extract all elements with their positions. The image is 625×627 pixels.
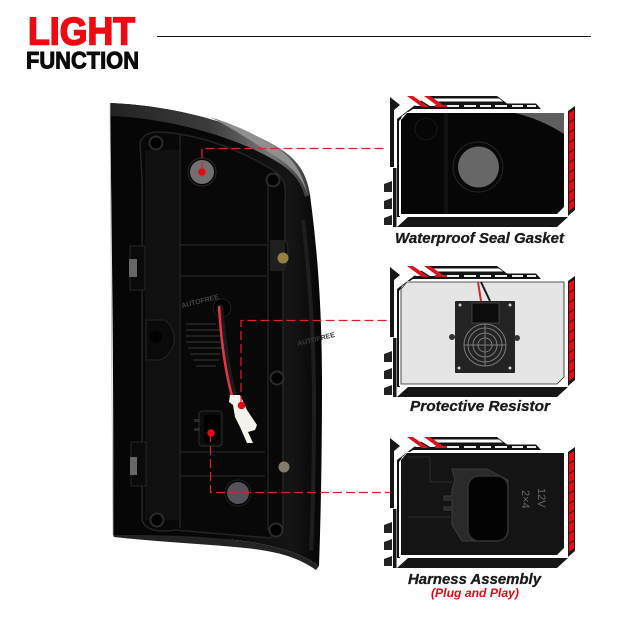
caption: Protective Resistor [410,398,551,415]
photo: gasket close-up [399,112,565,216]
photo: connector [399,452,565,557]
title: LIGHT [28,10,135,54]
warning text block [186,323,222,367]
panel: protective resistor [384,266,575,415]
callout line: harness assembly [210,433,390,492]
callout line: protective resistor [241,320,392,405]
lamp body [110,103,322,566]
black connector [194,411,222,446]
title [26,10,139,74]
inner plate [140,132,288,538]
caption: Waterproof Seal Gasket [395,230,565,247]
sub-caption: (Plug and Play) [431,588,519,600]
tail light rear view [110,103,336,570]
photo: resistor [399,281,565,386]
title: FUNCTION [26,48,139,74]
screws [150,136,284,536]
callout dots [198,168,245,437]
callout line: waterproof seal gasket [202,148,387,171]
caption: Harness Assembly [408,571,542,588]
side clips [129,246,146,486]
photo: connector: 12V [535,488,547,508]
gasket bottom [225,480,251,506]
molded hole [146,320,174,360]
tail light rear view: AUTOFREE [297,332,336,348]
mounting nuts [270,240,290,472]
panel: harness assembly [384,437,575,600]
photo: connector: 2×4 [519,490,531,509]
gasket top [188,158,216,186]
watermark: AUTOFREE [181,294,220,310]
wires and white plug [213,299,257,443]
panel: waterproof seal gasket [384,96,575,247]
